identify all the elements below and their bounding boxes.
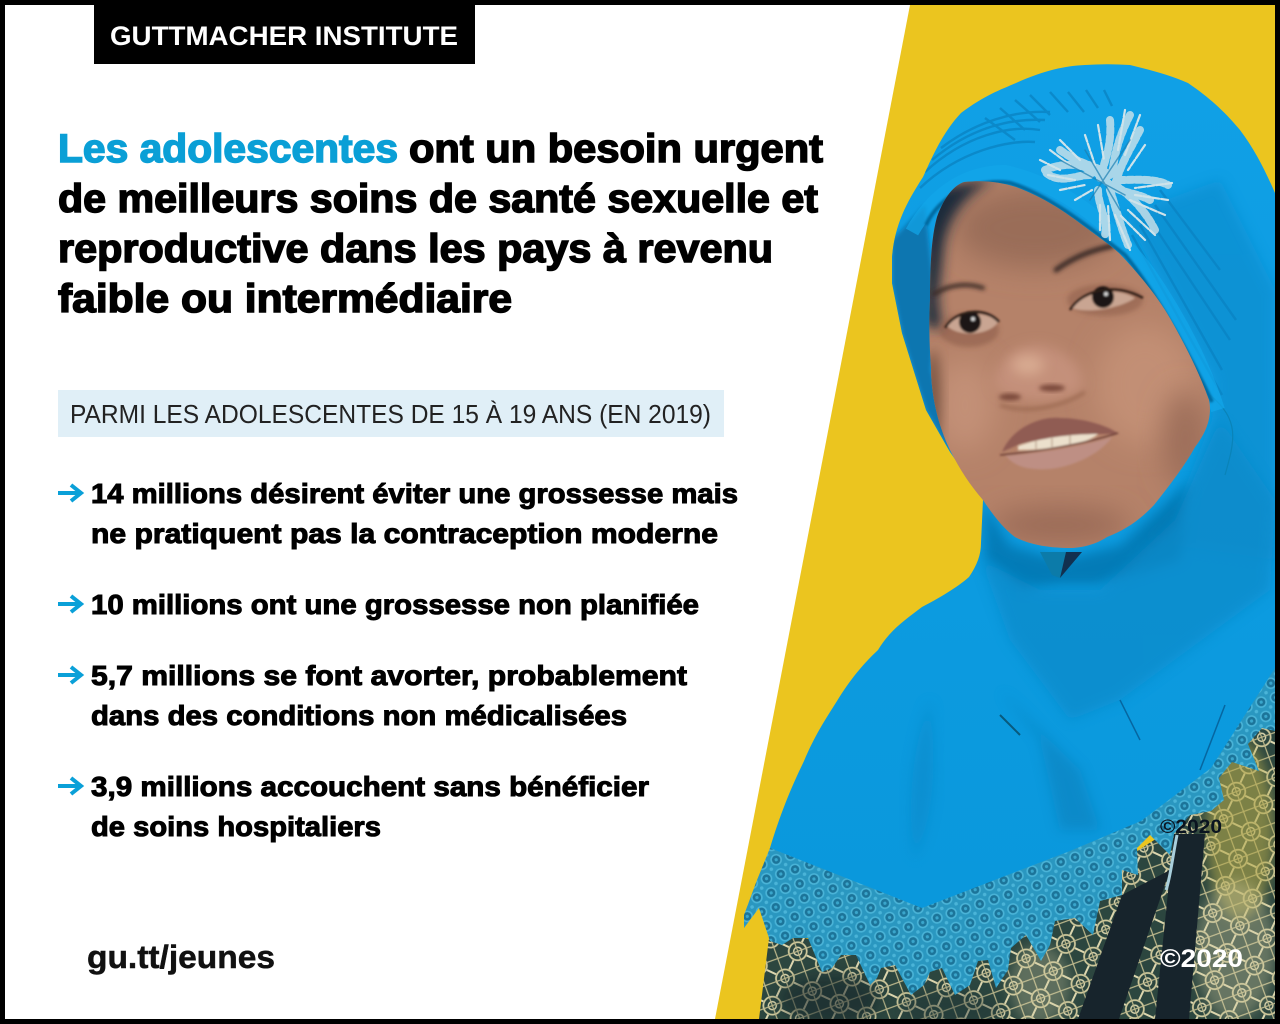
list item 4 bbox=[58, 771, 649, 842]
title: ont un besoin urgent bbox=[409, 127, 823, 171]
photo: girl wearing blue hijab bbox=[744, 64, 1275, 1024]
arrow bbox=[58, 667, 81, 683]
eyes bbox=[939, 284, 1143, 347]
arrow bbox=[58, 485, 81, 501]
header: Guttmacher Institute: GUTTMACHER INSTITUTE bbox=[110, 21, 458, 51]
list item 4: de soins hospitaliers bbox=[91, 811, 381, 842]
arrow bbox=[58, 596, 81, 612]
arrow bbox=[58, 778, 81, 794]
header: Guttmacher Institute bbox=[94, 5, 475, 64]
faint photo credit: ©2020 bbox=[1160, 817, 1222, 838]
visor brim bbox=[912, 172, 1218, 410]
title: de meilleurs soins de santé sexuelle et bbox=[58, 177, 818, 221]
hijab bbox=[770, 64, 1275, 908]
title: faible ou intermédiaire bbox=[58, 277, 512, 321]
skin shading bbox=[925, 178, 1207, 543]
list item 1: 14 millions désirent éviter une grossesse mais bbox=[91, 478, 738, 509]
list item 4: 3,9 millions accouchent sans bénéficier bbox=[91, 771, 649, 802]
mouth bbox=[1000, 418, 1119, 469]
hijab shading and folds bbox=[892, 180, 1275, 860]
batik dress bbox=[759, 728, 1275, 1019]
nose bbox=[994, 345, 1085, 409]
list item 1: ne pratiquent pas la contraception moderne bbox=[91, 518, 718, 549]
title bbox=[58, 127, 823, 321]
list item 3: dans des conditions non médicalisées bbox=[91, 700, 627, 731]
list item 2: 10 millions ont une grossesse non planifiée bbox=[91, 589, 699, 620]
list item 3 bbox=[58, 660, 687, 731]
eyebrows bbox=[934, 246, 1112, 294]
subheading band bbox=[58, 390, 724, 437]
face bbox=[925, 178, 1210, 548]
brooch bbox=[1040, 110, 1172, 250]
list item 3: 5,7 millions se font avorter, probablement bbox=[91, 660, 687, 691]
hood pleats bbox=[920, 90, 1236, 395]
copyright: ©2020 bbox=[1160, 945, 1243, 973]
subheading band: PARMI LES ADOLESCENTES DE 15 À 19 ANS (EN 2019) bbox=[70, 400, 711, 429]
list item 1 bbox=[58, 478, 738, 549]
yellow diagonal panel bbox=[715, 5, 1275, 1019]
url: gu.tt/jeunes bbox=[87, 939, 275, 975]
title: reproductive dans les pays à revenu bbox=[58, 227, 773, 271]
title: Les adolescentes bbox=[58, 127, 398, 171]
lace trim bbox=[744, 660, 1275, 995]
